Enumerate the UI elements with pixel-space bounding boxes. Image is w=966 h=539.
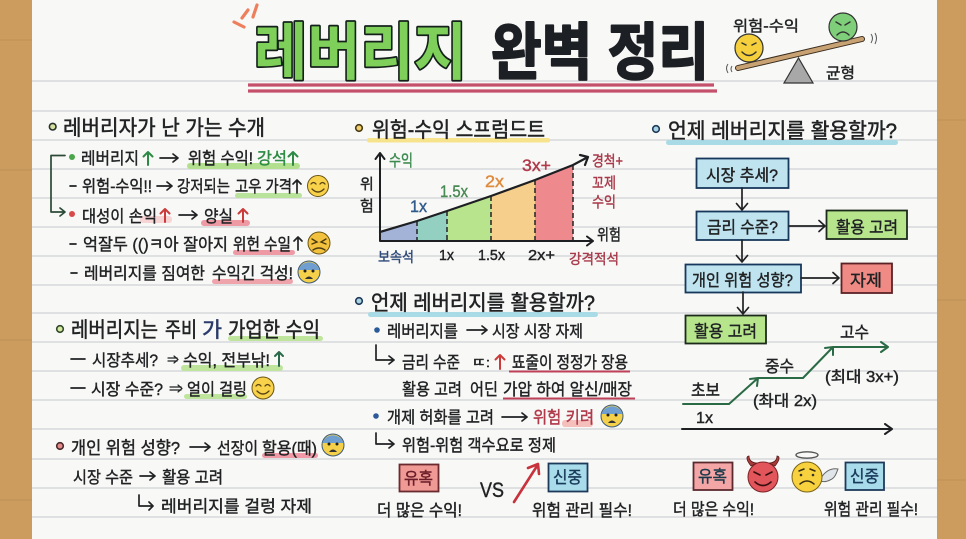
chart: labels: 1x [439,247,454,264]
badge: temptation: 유혹 [404,469,433,488]
step labels: (최대 3x+) [825,368,899,386]
row: caution: 위헌 수일 [233,235,291,254]
chart: labels: 꼬제 [592,175,616,192]
baseline arrow [682,424,892,434]
badge: temptation [400,464,438,492]
chart: labels [360,152,623,267]
flow box: personal risk: 개인 위험 성향? [692,271,793,290]
row: consider using [73,468,223,487]
chart: labels: 위험 [597,226,621,244]
chart: labels: 수익 [592,194,616,211]
badge: caution: 신중 [850,467,879,486]
icon: risk-return seesaw: 균형 [826,65,855,82]
arrow: down to rate [736,188,748,210]
heading: left section two: 가 [202,319,222,342]
arrow: red up [514,464,539,502]
icon: risk-return seesaw [726,13,876,83]
row: consider [402,380,635,399]
row: excessive debt [373,405,623,427]
row: risk ratio [376,433,556,455]
title decoration: orange sparks [234,5,257,27]
bracket arrow linking rows [51,156,65,216]
flow box: interest rate: 금리 수준? [707,218,778,237]
flow box: consider use bottom [686,316,766,344]
row: leverage market [374,322,583,341]
step labels: (촤대 2x) [753,392,817,410]
arrow: down to tendency [736,240,748,262]
flow box: refrain [842,264,892,293]
arrow: down to consider [738,292,748,314]
highlights for left section one [140,163,302,284]
chart: labels: 수익 [389,152,413,170]
flow box: consider use [826,210,907,239]
title word: leverage: 레버리지 [254,19,467,88]
row: personal risk tendency: 할용(때) [262,439,317,458]
title double underline [248,85,717,91]
row: leverage up: 위험 수익! [188,149,253,168]
heading: when to use (right): 언제 레버리지를 활용할까? [668,120,897,143]
row: consider: 가압 하여 알신/매장 [503,380,632,399]
chart: labels: 보속석 [378,249,414,265]
row: risk ratio: 위험-위험 객수요로 정제 [402,436,556,455]
step labels: 초보 [691,382,720,400]
row: risk-return [70,176,328,196]
row: leverage market: 시장 시장 자제 [492,322,583,341]
step labels: 중수 [765,358,794,376]
row: opportunity loss: 양실 [204,207,233,226]
step labels: 고수 [840,324,869,342]
highlights for left section two [181,336,323,399]
icon: devil face [747,456,779,492]
row: refrain from leverage: 레버리지를 걸렁 자제 [161,497,312,516]
step labels: 1x [696,410,713,427]
step line [683,342,888,404]
row: interest rate: ㄸ: [472,355,490,370]
panel: flowchart [653,120,907,344]
chart: labels: 경척+ [592,153,623,170]
chart: trend arrow [380,155,588,232]
text: risk management: 위험 관리 필수! [824,500,918,519]
chart: coloured areas [380,165,573,241]
panel: risk-return spread chart [356,119,623,267]
row: overuse warning: 레버리지를 짐여한 [84,264,205,283]
step labels [691,324,899,427]
row: personal risk tendency: 선장이 [217,439,258,458]
text: more return: 더 많은 수익! [377,501,462,520]
badge: caution: 신중 [553,468,582,487]
heading: when to use: 언제 레버리지를 활용할까? [371,292,595,315]
row: overuse warning [71,261,320,283]
chart: labels: 1.5x [440,182,468,201]
chart: dashed dividers [417,165,573,241]
row: market level: 얼이 걸링 [187,380,247,399]
flow box: consider use: 활용 고려 [836,218,898,237]
row: market trend: 수익, 전부낚! [183,351,270,370]
chart: labels: 1.5x [478,247,505,264]
arrow: right to consider [789,220,825,232]
chart: leverage skill steps [682,324,899,434]
chart: labels: 위 [360,176,374,193]
row: interest rate [376,345,630,372]
title [234,5,717,91]
highlight: use when [262,453,318,458]
chart: labels: 험 [360,198,374,215]
row: leverage up [69,149,298,168]
flow box: refrain: 자제 [850,271,882,290]
icon: angel face [792,452,838,492]
row: personal risk tendency [57,434,344,458]
panel: left column bottom [57,434,344,516]
row: market level [71,377,274,399]
panel: left column top [49,117,330,284]
row: risk-return: 고우 가격 [235,177,292,196]
badge: temptation: 유혹 [698,467,727,486]
row: consider using: 활용 고려 [162,468,223,487]
flow box: interest rate [696,212,788,240]
row: excessive debt: 위험 키려 [533,408,594,427]
heading: left section two: 레버리지는 [71,319,158,342]
heading: left section two [57,319,320,342]
flow box: market trend: 시장 추세? [706,166,778,185]
badge: temptation [694,462,732,490]
text: more return: 더 많은 수익! [673,500,754,519]
row: opportunity loss: 대성이 손익 [82,207,157,226]
row: excessive debt: 개제 허화를 고려 [387,408,494,427]
row: leverage up: 레버리지 [81,149,139,168]
text: vs: VS [480,479,504,502]
chart: axes [376,153,593,246]
badge: caution [548,464,588,492]
row: overuse warning: 수익긴 걱성! [212,264,293,283]
row: market trend [71,351,283,370]
arrow: right to refrain [801,272,839,284]
text: risk management: 위험 관리 필수! [532,501,632,520]
heading: left section two: 주비 [165,319,197,342]
row: consider using: 시장 수준 [73,468,133,487]
heading: left section one: 레버리자가 난 가는 수개 [63,117,265,140]
row: caution [70,232,330,254]
badge: caution [846,462,884,490]
row: opportunity loss [69,207,248,226]
title words: complete summary: 완벽 정리 [491,19,709,88]
flow box: market trend [696,158,788,188]
row: consider: 어딘 [470,380,498,399]
row: market level: 시장 수준? [91,380,163,399]
flow box: consider use bottom: 활용 고려 [694,322,757,341]
row: risk-return: 강저되는 [177,177,230,196]
chart: labels: 2x [485,172,505,191]
row: leverage up: 강석 [257,149,287,168]
row: leverage market: 레버리지를 [387,322,458,341]
icon: risk-return seesaw: 위험-수익 [733,18,799,35]
row: consider: 활용 고려 [402,380,462,399]
heading: left section two: 가업한 수익 [228,319,320,342]
chart: labels: 3x+ [522,156,551,175]
panel: devil and angel comparison [673,452,918,519]
flow box: personal risk [686,264,801,292]
comparison: temptation vs caution [377,464,632,520]
row: caution: 억잘두 (()ㅋ아 잘아지 [83,235,228,254]
row: interest rate: 금리 수준 [402,353,460,372]
row: personal risk tendency: 개인 위험 성향? [71,438,180,458]
chart: labels: 강격적석 [569,251,619,267]
chart: labels: 1x [410,197,427,216]
row: market trend: 시장추세? [92,351,158,370]
heading: spread: 위험-수익 스프럼드트 [372,119,545,142]
row: risk-return: 위험-수익!! [82,177,152,196]
panel: when to use leverage (centre) [356,292,635,520]
chart: labels: 2x+ [528,247,555,264]
panel: left column middle [57,319,323,399]
row: interest rate: 뚀줄이 정정가 장용 [512,353,628,372]
